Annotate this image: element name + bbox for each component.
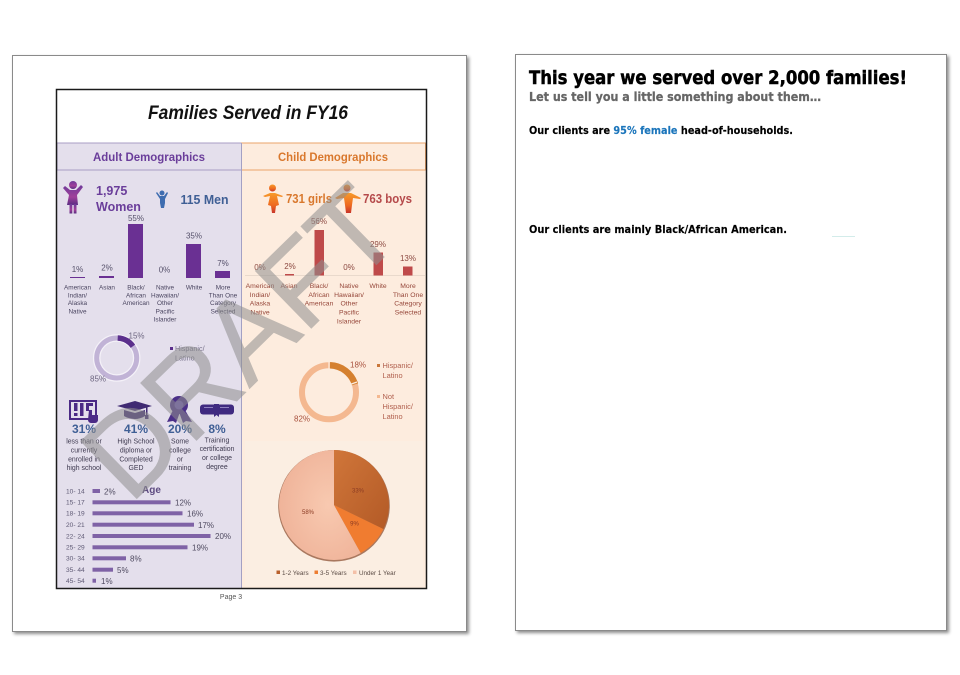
chart: child race bars: Native (339, 283, 359, 290)
chart: child Hispanic donut: 18% (350, 360, 366, 370)
chart: child Hispanic donut: Latino (382, 371, 403, 380)
stats: education levels (66, 422, 235, 472)
subheading: Let us tell you a little something about them… (529, 90, 821, 104)
chart: adult race bars: Other (157, 300, 174, 307)
chart: age bars: 1% (101, 577, 113, 586)
chart: adult race bars: 35% (186, 232, 202, 240)
stats: education levels: or college (202, 455, 232, 462)
chart: adult Hispanic donut: Hispanic/ (175, 344, 205, 353)
watermark: DRAFT: DRAFT (57, 161, 423, 523)
chart: child Hispanic donut: 82% (294, 414, 310, 424)
stat: girls: 731 girls (286, 192, 332, 206)
chart: years pie: 3-5 Years (320, 570, 347, 577)
stats: education levels: 20% (168, 422, 192, 436)
heading: child demographics (242, 143, 426, 170)
chart: adult Hispanic donut: 85% (90, 374, 106, 384)
icon: graduation cap (117, 401, 152, 419)
chart: child race bars: 0% (254, 263, 266, 272)
chart: age bars: 20% (215, 532, 231, 541)
chart: adult race bars: 55% (128, 214, 144, 223)
chart: years pie: 1-2 Years (282, 570, 309, 577)
chart: child race bars: Indian/ (250, 292, 270, 299)
pie background tint (245, 441, 423, 586)
chart: age bars: 45- 54 (66, 578, 85, 585)
chart: child Hispanic donut (294, 360, 414, 424)
chart: child race bars: Pacific (339, 310, 360, 316)
chart: age bars: 22- 24 (66, 534, 85, 540)
chart: child Hispanic donut: Not (382, 392, 394, 401)
stats: education levels: GED (129, 465, 143, 472)
chart: years pie: 9% (350, 522, 360, 528)
chart: adult race bars: American (122, 300, 150, 307)
chart: age bars: 15- 17 (66, 500, 85, 506)
divider between adult and child panels (240, 143, 242, 588)
stats: education levels: 41% (124, 422, 148, 436)
chart: adult race bars: Than One (209, 292, 238, 300)
chart: adult race bars: 7% (217, 259, 229, 268)
heading: served over 2,000 families: This year we served over 2,000 families! (529, 67, 907, 89)
stats: education levels: currently (71, 448, 98, 454)
chart: adult race bars: Indian/ (68, 292, 87, 300)
chart: adult race bars: Black/ (127, 284, 145, 292)
chart: adult race bars: 1% (72, 265, 83, 274)
chart: adult race bars: American (64, 284, 91, 292)
chart: child race bars: Alaska (250, 300, 270, 308)
heading: child demographics: Child Demographics (278, 150, 388, 164)
chart: adult race bars: 0% (159, 266, 170, 274)
chart: adult race bars: Native (156, 284, 174, 292)
chart: years pie (276, 450, 396, 577)
text: female head-of-households: Our clients are 95% female head-of-households. (529, 125, 793, 137)
stat: women: 1,975 (96, 184, 127, 198)
chart: adult race bars: 2% (101, 264, 113, 272)
icon: man (156, 190, 168, 208)
chart: child race bars: American (305, 300, 334, 308)
stats: education levels: 8% (208, 422, 226, 436)
chart: child race bars: African (308, 292, 330, 299)
chart: child race bars: White (369, 283, 387, 290)
chart: child Hispanic donut: Hispanic/ (382, 402, 414, 411)
chart: child race bars: 29% (370, 240, 386, 249)
icon: book and hand (69, 400, 98, 423)
stat: women: Women (96, 200, 141, 214)
chart: age bars: 2% (104, 488, 116, 496)
page 1: poster sheet (12, 56, 466, 632)
chart: child Hispanic donut: Latino (382, 412, 403, 421)
icon: boy (335, 184, 361, 213)
chart: adult race bars: Pacific (156, 308, 175, 316)
chart: child race bars: 2% (284, 262, 296, 271)
stats: education levels: Completed (119, 456, 153, 464)
chart: age bars: 5% (117, 566, 129, 575)
chart: child Hispanic donut: Hispanic/ (382, 361, 414, 370)
chart: age bars: 35- 44 (66, 567, 85, 574)
chart: age bars (66, 485, 231, 586)
chart: child race bars: Black/ (310, 283, 328, 290)
chart: age bars: 12% (175, 498, 191, 508)
chart: child race bars: Hawaiian/ (334, 292, 364, 299)
chart: years pie: 33% (352, 488, 365, 494)
chart: adult Hispanic donut: 15% (128, 332, 145, 340)
chart: child race bars (245, 217, 425, 326)
chart: adult race bars: Hawaiian/ (151, 292, 179, 300)
stats: education levels: college (169, 448, 191, 454)
chart: age bars: 25- 29 (66, 544, 85, 552)
chart: child race bars: 13% (400, 254, 416, 263)
chart: age bars: 16% (187, 510, 203, 518)
chart: adult race bars: Asian (99, 284, 115, 292)
chart: child race bars: Selected (395, 310, 421, 316)
stat: boys: 763 boys (363, 192, 412, 206)
stats: education levels: less than or (66, 438, 103, 446)
chart: child race bars: Other (340, 300, 358, 308)
icon: girl (263, 184, 283, 213)
chart: adult race bars: More (216, 284, 231, 292)
heading: adult demographics: Adult Demographics (93, 150, 205, 164)
chart: adult race bars: White (186, 284, 203, 292)
icon: woman (63, 181, 83, 214)
chart: child race bars: Islander (337, 318, 362, 326)
text: mainly Black/African American: Our clients are mainly Black/African American. (529, 224, 787, 236)
stats: education levels: or (177, 456, 184, 464)
chart: adult race bars (64, 214, 238, 324)
chart: age bars: Age (142, 485, 161, 496)
chart: years pie: 58% (302, 510, 315, 516)
chart: child race bars: More (400, 283, 416, 290)
panel: adult background (57, 170, 241, 588)
chart: child race bars: Than One (393, 292, 423, 299)
icon: diploma (200, 404, 234, 417)
chart: adult Hispanic donut: Latino (175, 354, 195, 362)
icon: rosette (167, 396, 192, 423)
heading: adult demographics (57, 143, 242, 170)
chart: child race bars: Native (250, 310, 270, 316)
chart: age bars: 19% (192, 544, 208, 552)
chart: adult race bars: Alaska (68, 300, 88, 307)
chart: years pie: Under 1 Year (359, 570, 396, 577)
chart: adult race bars: Islander (154, 316, 177, 324)
stats: education levels: enrolled in (68, 456, 100, 464)
chart: adult Hispanic donut (90, 332, 205, 384)
chart: child race bars: Category (394, 300, 422, 308)
chart: age bars: 20- 21 (66, 522, 85, 529)
stats: education levels: high school (67, 465, 102, 472)
chart: age bars: 8% (130, 554, 142, 564)
stats: education levels: Some (171, 438, 189, 446)
chart: child race bars: Asian (280, 283, 298, 290)
stats: education levels: degree (206, 464, 228, 471)
chart: adult race bars: African (126, 292, 146, 300)
chart: age bars: 17% (198, 521, 214, 530)
chart: child race bars: 0% (343, 263, 355, 272)
chart: age bars: 10- 14 (66, 488, 85, 496)
chart: child race bars: 56% (311, 217, 327, 226)
poster frame (56, 90, 426, 588)
stats: education levels: diploma or (120, 448, 153, 454)
page number: Page 3 (220, 594, 242, 601)
chart: adult race bars: Native (68, 308, 87, 316)
stats: education levels: High School (117, 438, 155, 446)
stats: education levels: training (169, 465, 191, 472)
stats: education levels: 31% (72, 422, 96, 436)
panel: child background (242, 170, 426, 588)
chart: age bars: 30- 34 (66, 556, 85, 562)
page 2: text sheet (516, 54, 946, 630)
chart: age bars: 18- 19 (66, 510, 85, 518)
stats: education levels: Training (205, 438, 229, 444)
stats: education levels: certification (200, 446, 235, 453)
chart: adult race bars: Selected (211, 308, 236, 316)
heading: title: Families Served in FY16 (148, 103, 348, 124)
stat: men: 115 Men (180, 193, 228, 207)
chart: child race bars: American (246, 283, 275, 290)
chart: adult race bars: Category (210, 300, 237, 307)
